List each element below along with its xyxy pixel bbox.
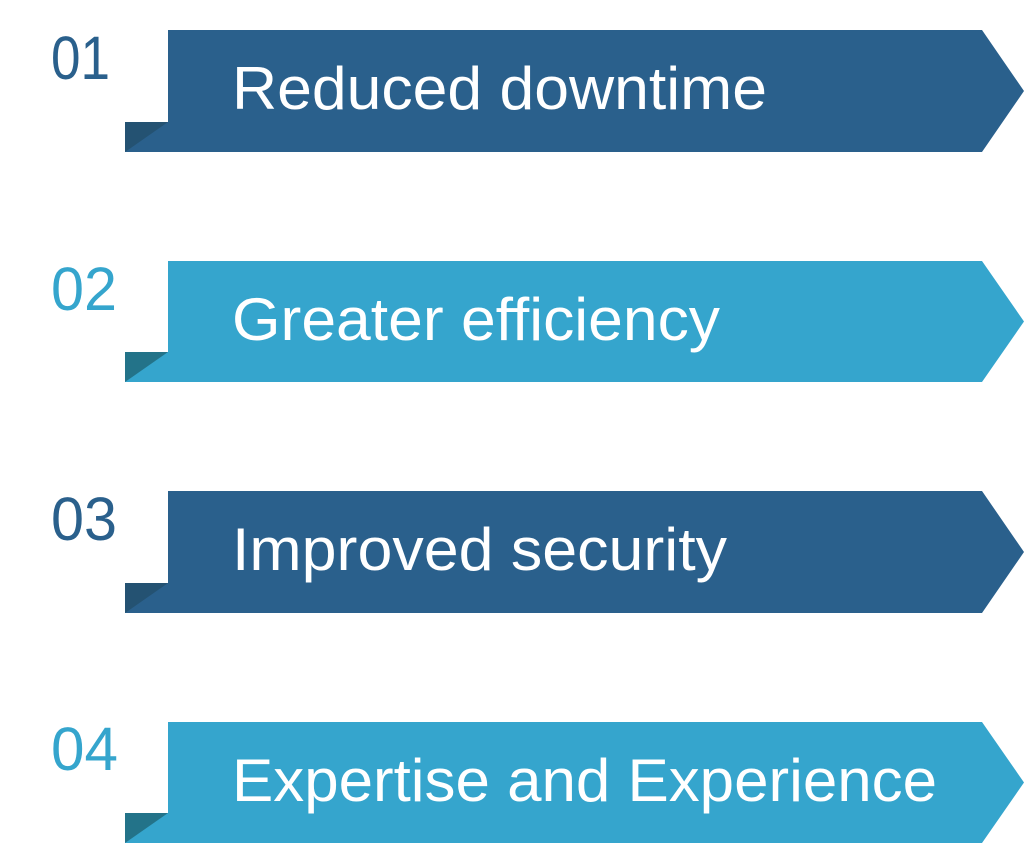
item 02: greater efficiency <box>51 255 1024 382</box>
label 01: Reduced downtime <box>232 55 767 122</box>
label 02: Greater efficiency <box>232 286 720 353</box>
banner 04 <box>125 722 1024 843</box>
fold 04 <box>125 813 168 843</box>
banner 01 <box>125 30 1024 152</box>
number 01: 01 <box>51 24 110 92</box>
fold 03 <box>125 583 168 613</box>
number 02: 02 <box>51 255 117 323</box>
item 01: reduced downtime <box>51 24 1024 152</box>
banner 02 <box>125 261 1024 382</box>
fold 01 <box>125 122 168 152</box>
fold 02 <box>125 352 168 382</box>
banner 03 <box>125 491 1024 613</box>
number 03: 03 <box>51 485 117 553</box>
item 03: improved security <box>51 485 1024 613</box>
label 04: Expertise and Experience <box>232 747 937 814</box>
item 04: expertise and experience <box>51 715 1024 843</box>
label 03: Improved security <box>232 516 727 583</box>
number 04: 04 <box>51 715 118 783</box>
